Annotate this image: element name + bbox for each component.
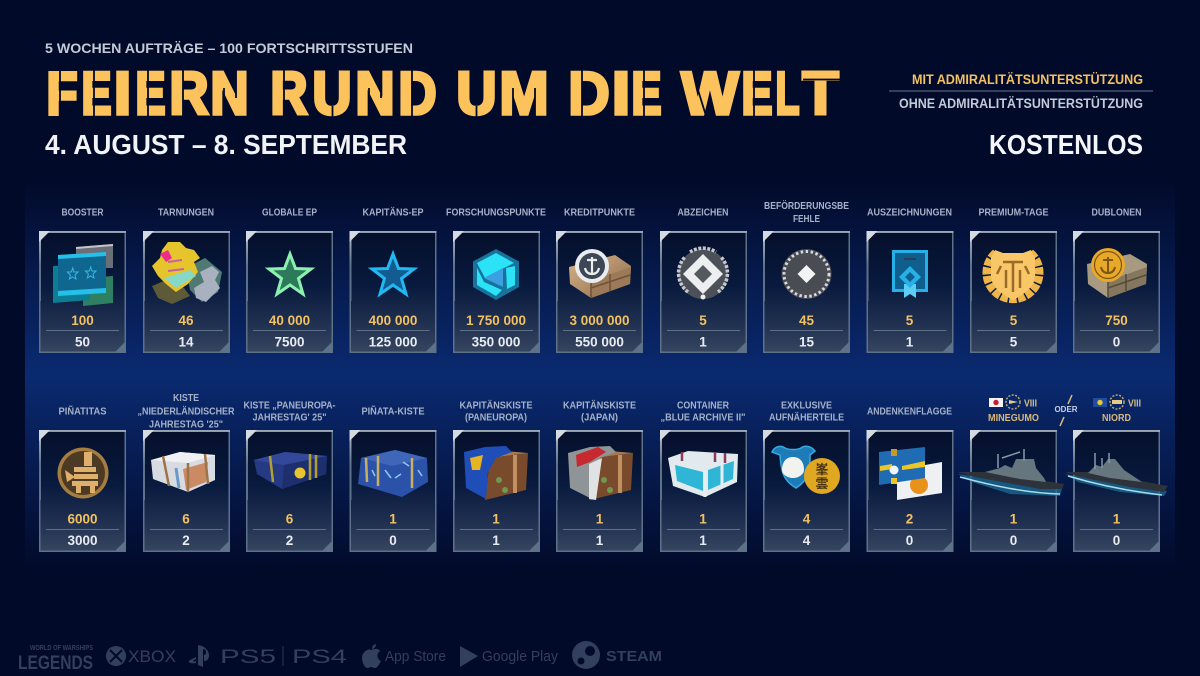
- icon: playstation: [189, 645, 209, 667]
- header: [988, 395, 1039, 424]
- values: 2: [906, 512, 913, 526]
- values: 3 000 000: [569, 313, 630, 328]
- label: FEHLE: [793, 213, 820, 225]
- values: 3000: [67, 533, 98, 548]
- icon: research hexagon: [473, 249, 519, 300]
- values: [389, 512, 397, 548]
- values: 7500: [274, 334, 305, 350]
- icon: google play: [460, 646, 478, 667]
- card: kiste paneuropa: [244, 400, 336, 552]
- footer: platforms: App Store: [385, 648, 446, 665]
- values: 100: [71, 313, 94, 328]
- icon: green star: [269, 254, 311, 294]
- values: 400 000: [369, 313, 417, 328]
- title: U: [312, 60, 352, 127]
- title: T: [802, 60, 838, 127]
- values: [182, 512, 190, 548]
- card: pinata-kiste: [350, 404, 436, 552]
- label: „NIEDERLÄNDISCHER: [138, 404, 235, 418]
- values: 0: [1010, 533, 1017, 548]
- icon: orders: [782, 249, 832, 299]
- icon: ship niord: [1065, 453, 1168, 496]
- label: „BLUE ARCHIVE II": [660, 412, 746, 424]
- card: andenkenflagge: [866, 406, 954, 552]
- values: 1: [596, 512, 604, 526]
- values: 2: [286, 533, 293, 548]
- card: forschungspunkte: [446, 206, 546, 353]
- icon: credits crate: [569, 249, 631, 298]
- separator: oder: ODER: [1054, 405, 1078, 414]
- title: E: [632, 60, 662, 127]
- values: 0: [1113, 334, 1120, 350]
- card: container blue archive: [660, 400, 747, 552]
- label: KAPITÄNSKISTE: [460, 398, 532, 412]
- label: PREMIUM-TAGE: [978, 206, 1048, 218]
- header: [45, 40, 840, 160]
- logo: legends: WORLD OF WARSHIPS: [30, 645, 93, 652]
- icon: certificate: [892, 250, 928, 298]
- card: auszeichnungen: [866, 206, 954, 353]
- label: (PANEUROPA): [465, 412, 527, 424]
- footer: platforms: PS4: [292, 647, 348, 668]
- header: NIORD: [1102, 412, 1131, 424]
- values: 1: [699, 512, 707, 526]
- title: F: [46, 60, 78, 127]
- class emblem: [1006, 395, 1020, 409]
- values: [699, 313, 707, 350]
- label: TARNUNGEN: [158, 206, 214, 218]
- title: R: [270, 60, 308, 127]
- label: AUFNÄHERTEILE: [769, 410, 844, 424]
- dates: 4. AUGUST – 8. SEPTEMBER: [45, 129, 407, 160]
- title: R: [170, 60, 208, 127]
- card: kapitaenskiste japan: [556, 398, 643, 552]
- flag japan: [989, 398, 1003, 407]
- footer: platforms: [18, 641, 662, 674]
- values: 15: [799, 334, 814, 350]
- label: [660, 400, 746, 424]
- values: [1105, 313, 1128, 350]
- header: [1093, 395, 1141, 424]
- values: 1: [389, 512, 397, 526]
- label: [563, 398, 636, 424]
- values: [906, 313, 914, 350]
- values: 6: [182, 512, 190, 526]
- header: VIII: [1024, 398, 1037, 410]
- values: [799, 313, 814, 350]
- values: 14: [178, 334, 194, 350]
- values: [906, 512, 913, 548]
- footer: platforms: STEAM: [606, 648, 662, 665]
- title: [46, 60, 840, 127]
- label: BEFÖRDERUNGSBE: [764, 199, 849, 212]
- label: PIÑATITAS: [58, 404, 106, 418]
- icon: steam: [572, 641, 600, 669]
- icon: patches: 雲: [815, 476, 829, 491]
- title: E: [82, 60, 112, 127]
- label: ANDENKENFLAGGE: [867, 406, 952, 418]
- values: 550 000: [575, 334, 624, 350]
- icon: captain chest blue: [464, 446, 528, 500]
- card: premium-tage: [970, 206, 1057, 353]
- icon: captain chest japan: [568, 446, 633, 500]
- icon: white crate: [151, 452, 215, 492]
- legend: KOSTENLOS: [989, 129, 1143, 160]
- card: booster: [39, 206, 126, 353]
- footer: platforms: PS5: [220, 647, 276, 668]
- values: [269, 313, 310, 350]
- values: 4: [803, 512, 811, 526]
- values: [569, 313, 630, 350]
- flag: [1093, 398, 1107, 407]
- card: pinatitas: [39, 404, 126, 552]
- values: 5: [699, 313, 707, 328]
- values: [178, 313, 194, 350]
- values: 4: [803, 533, 811, 548]
- icon: badge: [678, 248, 728, 300]
- header: VIII: [1128, 398, 1141, 410]
- values: 1: [906, 334, 914, 350]
- values: 350 000: [472, 334, 520, 350]
- title: E: [742, 60, 772, 127]
- values: [67, 512, 98, 548]
- card: abzeichen: [660, 206, 747, 353]
- label: DUBLONEN: [1092, 206, 1142, 218]
- values: 1: [699, 533, 707, 548]
- title: U: [456, 60, 496, 127]
- legend: MIT ADMIRALITÄTSUNTERSTÜTZUNG: [912, 72, 1143, 87]
- legend: [889, 72, 1153, 160]
- label: KISTE: [173, 392, 199, 404]
- icon: white container: [668, 451, 738, 497]
- label: JAHRESTAG '25": [149, 418, 223, 430]
- values: [699, 512, 707, 548]
- icon: premium wreath: [987, 250, 1039, 300]
- values: 1: [699, 334, 707, 350]
- values: [1113, 512, 1121, 548]
- card: kiste niederlaendisch: [138, 392, 235, 552]
- values: 5: [1010, 313, 1018, 328]
- values: [71, 313, 94, 350]
- title: I: [612, 60, 630, 127]
- label: KAPITÄNS-EP: [362, 206, 424, 218]
- icon: patches: 峯: [815, 462, 829, 477]
- label: [460, 398, 532, 424]
- label: JAHRESTAG' 25": [252, 412, 327, 424]
- title: I: [114, 60, 131, 127]
- card: tarnungen: [143, 206, 230, 353]
- footer: platforms: XBOX: [128, 647, 176, 666]
- values: 1: [1010, 512, 1018, 526]
- icon: pinata crate: [358, 450, 428, 497]
- title: N: [356, 60, 394, 127]
- label: KISTE „PANEUROPA-: [244, 400, 336, 412]
- label: GLOBALE EP: [262, 206, 317, 218]
- icon: ship minegumo: [957, 449, 1064, 496]
- card: niord: [1065, 395, 1168, 552]
- icon: apple: [362, 644, 381, 668]
- values: 50: [75, 334, 90, 350]
- card: kreditpunkte: [556, 206, 643, 353]
- values: 1: [492, 512, 500, 526]
- separator: oder: [1054, 395, 1078, 426]
- icon: flags: [879, 447, 942, 500]
- values: 5: [1010, 334, 1018, 350]
- label: ABZEICHEN: [678, 206, 728, 218]
- title: D: [398, 60, 436, 127]
- label: KREDITPUNKTE: [564, 206, 635, 218]
- values: 750: [1105, 313, 1128, 328]
- values: 0: [906, 533, 913, 548]
- values: [492, 512, 500, 548]
- card: minegumo: [957, 395, 1064, 552]
- card: dublonen: [1073, 206, 1160, 353]
- card: globale ep: [246, 206, 333, 353]
- label: [244, 400, 336, 424]
- values: 45: [799, 313, 814, 328]
- values: [466, 313, 526, 350]
- title: W: [682, 60, 739, 127]
- values: [1010, 512, 1018, 548]
- icon: blue crate: [254, 452, 327, 489]
- values: 1: [596, 533, 604, 548]
- icon: patches: [772, 446, 840, 494]
- values: 2: [182, 533, 190, 548]
- title: L: [776, 60, 800, 127]
- label: [138, 392, 235, 430]
- label: BOOSTER: [62, 206, 104, 218]
- class emblem: [1110, 395, 1124, 409]
- label: [769, 400, 844, 424]
- label: CONTAINER: [677, 400, 729, 412]
- values: 6: [286, 512, 294, 526]
- values: [596, 512, 604, 548]
- icon: blue star: [372, 254, 414, 294]
- title: N: [210, 60, 248, 127]
- values: [286, 512, 294, 548]
- icon: booster: [53, 244, 113, 306]
- label: PIÑATA-KISTE: [362, 404, 424, 418]
- title: M: [500, 60, 548, 127]
- icon: pinata coin: [58, 448, 108, 498]
- logo: legends: LEGENDS: [18, 653, 93, 674]
- values: 125 000: [369, 334, 417, 350]
- values: 1: [492, 533, 500, 548]
- values: 46: [178, 313, 194, 328]
- label: KAPITÄNSKISTE: [563, 398, 636, 412]
- footer: platforms: Google Play: [482, 648, 558, 665]
- title: E: [136, 60, 166, 127]
- card: kapitaenskiste paneuropa: [453, 398, 540, 552]
- values: 1 750 000: [466, 313, 526, 328]
- title: D: [568, 60, 610, 127]
- label: (JAPAN): [581, 412, 618, 424]
- label: [764, 199, 849, 225]
- values: 5: [906, 313, 914, 328]
- label: AUSZEICHNUNGEN: [867, 206, 952, 218]
- card: aufnaeherteile: [763, 400, 850, 552]
- values: 6000: [67, 512, 98, 526]
- label: EXKLUSIVE: [781, 400, 832, 412]
- icon: xbox: [106, 646, 126, 666]
- header: MINEGUMO: [988, 412, 1039, 424]
- values: [369, 313, 417, 350]
- values: 40 000: [269, 313, 310, 328]
- subtitle: 5 WOCHEN AUFTRÄGE – 100 FORTSCHRITTSSTUFEN: [45, 40, 413, 56]
- values: [1010, 313, 1018, 350]
- values: 0: [389, 533, 397, 548]
- icon: camouflage: [152, 242, 222, 304]
- values: 0: [1113, 533, 1120, 548]
- logo: legends: [18, 645, 93, 674]
- values: [803, 512, 811, 548]
- values: 1: [1113, 512, 1121, 526]
- icon: doubloons crate: [1087, 248, 1147, 298]
- card: befoerderungsbefehle: [763, 199, 850, 353]
- legend: OHNE ADMIRALITÄTSUNTERSTÜTZUNG: [899, 96, 1143, 111]
- label: FORSCHUNGSPUNKTE: [446, 206, 546, 218]
- card: kapitaens-ep: [350, 206, 436, 353]
